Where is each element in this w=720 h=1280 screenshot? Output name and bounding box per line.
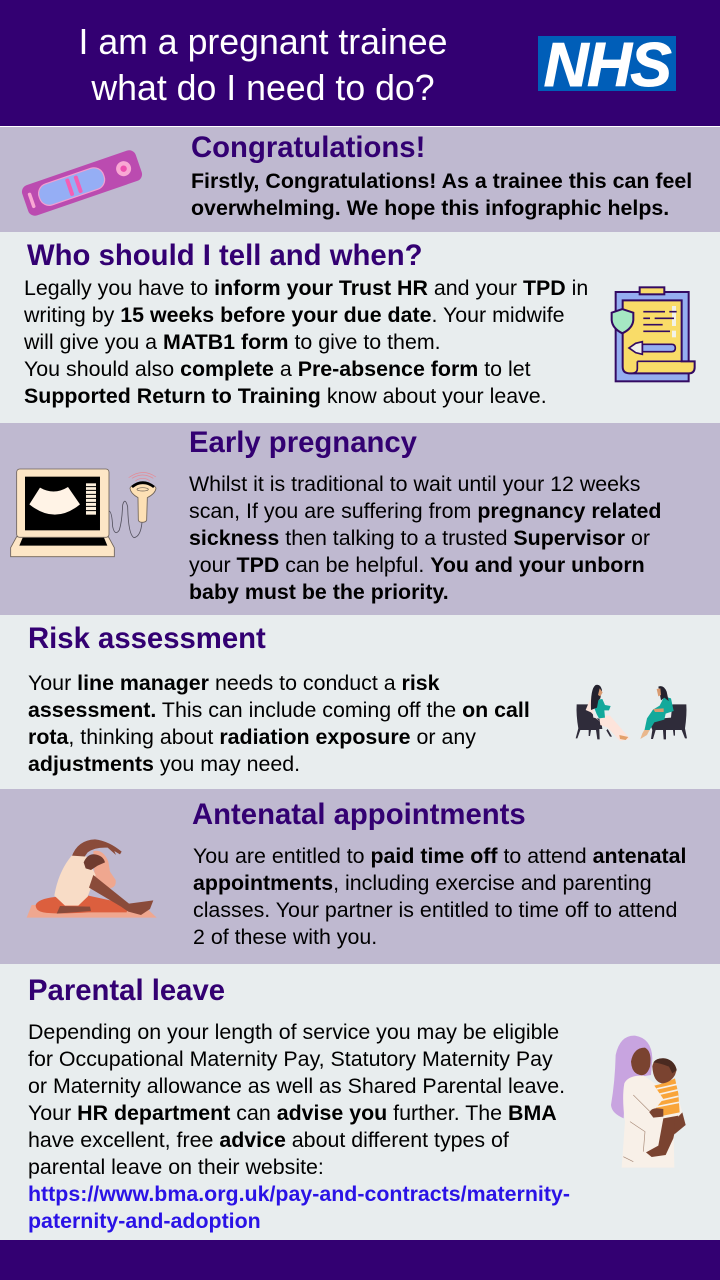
title: I am a pregnant trainee [78,22,448,62]
text block: early pregnancy: your TPD can be helpful. You and your unborn [189,552,645,576]
heading: antenatal appointments: Antenatal appointments [192,798,526,831]
text block: antenatal appointments: classes. Your partner is entitled to time off to attend [193,898,677,922]
panel: risk assessment [0,615,720,789]
heading: parental leave: Parental leave [28,974,225,1007]
title: what do I need to do? [91,68,435,108]
text block: congratulations: overwhelming. We hope this infographic helps. [191,196,669,220]
panel: congratulations [0,127,720,232]
icon: two women talking in armchairs [576,684,687,741]
panel: antenatal appointments [0,789,720,964]
text block: early pregnancy: Whilst it is traditional to wait until your 12 weeks [189,472,640,496]
text block: who should I tell: writing by 15 weeks before your due date. Your midwife [24,302,565,326]
text block: early pregnancy: baby must be the priority. [189,580,449,604]
text block: parental leave: for Occupational Maternity Pay, Statutory Maternity Pay [28,1046,553,1070]
text block: risk assessment: adjustments you may need. [28,752,300,776]
text block: early pregnancy [189,472,661,604]
text block: parental leave: https://www.bma.org.uk/pay-and-contracts/maternity- [28,1182,570,1206]
header banner [0,0,720,126]
footer band [0,1240,720,1280]
panel: early pregnancy [0,423,720,615]
text block: who should I tell: will give you a MATB1 form to give to them. [24,330,441,354]
text block: who should I tell: Supported Return to Training know about your leave. [24,384,547,408]
text block: antenatal appointments: You are entitled to paid time off to attend antenatal [193,844,686,868]
text block: antenatal appointments: 2 of these with you. [193,924,377,948]
icon: mother holding baby [611,1036,686,1168]
text block: congratulations: Firstly, Congratulations! As a trainee this can feel [191,169,692,193]
panel: who should I tell [0,232,720,423]
text block: early pregnancy: sickness then talking to a trusted Supervisor or [189,526,650,550]
text block: who should I tell: You should also complete a Pre-absence form to let [24,356,531,380]
icon: ultrasound machine [10,468,156,558]
icon: woman stretching on yoga mat [26,839,156,918]
title [78,22,448,108]
heading: who should I tell: Who should I tell and when? [27,239,422,272]
text block: parental leave: or Maternity allowance as well as Shared Parental leave. [28,1074,565,1098]
text block: early pregnancy: scan, If you are suffering from pregnancy related [189,498,661,522]
text block: antenatal appointments: appointments, including exercise and parenting [193,870,652,894]
text block: who should I tell: Legally you have to inform your Trust HR and your TPD in [24,276,588,300]
text block: risk assessment: Your line manager needs to conduct a risk [28,670,440,694]
text block: antenatal appointments [193,844,686,948]
text block: parental leave: Your HR department can advise you further. The BMA [28,1100,557,1124]
heading: risk assessment: Risk assessment [28,622,266,655]
text block: parental leave: parental leave on their website: [28,1154,324,1178]
text block: parental leave: paternity-and-adoption [28,1208,261,1232]
text block: congratulations [191,169,692,220]
heading: early pregnancy: Early pregnancy [189,426,417,459]
text block: who should I tell [24,276,588,408]
icon: clipboard document [610,286,696,382]
heading: congratulations: Congratulations! [191,131,425,164]
text block: risk assessment: rota, thinking about radiation exposure or any [28,724,476,748]
panel: parental leave [0,964,720,1240]
text block: parental leave: have excellent, free advice about different types of [28,1128,509,1152]
text block: risk assessment [28,670,530,776]
text block: parental leave: Depending on your length of service you may be eligible [28,1020,559,1044]
text block: parental leave [28,1020,570,1232]
text block: risk assessment: assessment. This can include coming off the on call [28,698,530,722]
icon: pregnancy test [22,150,142,216]
